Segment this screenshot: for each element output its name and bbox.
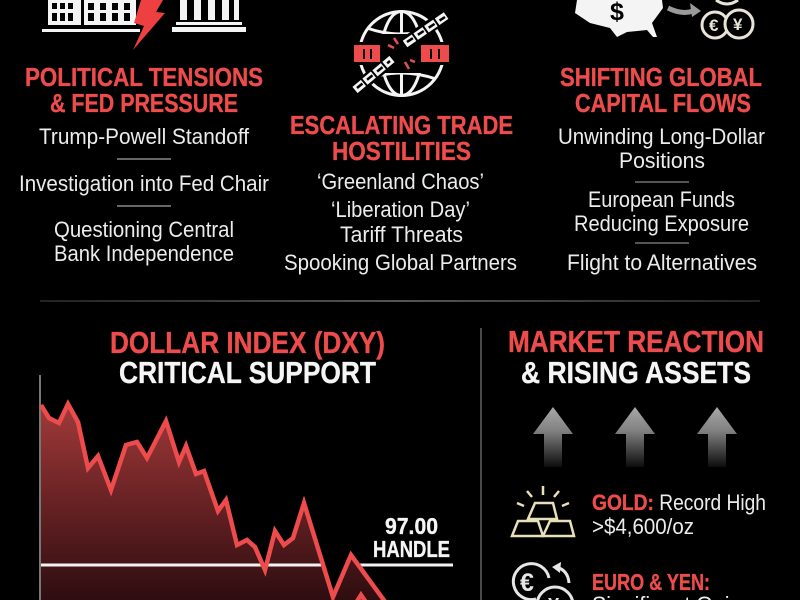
heading: capital flows xyxy=(560,62,762,118)
text: gold: >$4,600/oz xyxy=(592,514,694,539)
icon: US map, arrow and coins: € xyxy=(709,16,719,35)
text block: political tensions points: Trump-Powell Standoff xyxy=(39,124,250,149)
icon: gold bars xyxy=(512,486,574,536)
heading: capital flows: CAPITAL FLOWS xyxy=(575,88,751,118)
icon: euro and yen xyxy=(513,562,573,600)
icon: euro and yen: € xyxy=(520,569,534,597)
heading: trade hostilities: HOSTILITIES xyxy=(332,136,471,166)
heading: political tensions: & FED PRESSURE xyxy=(50,88,238,118)
panel: dollar index xyxy=(39,325,453,600)
heading: political tensions xyxy=(25,62,263,118)
line chart: DXY xyxy=(39,375,453,600)
heading: trade hostilities: ESCALATING TRADE xyxy=(290,110,513,140)
text: euro and yen: EURO & YEN: xyxy=(592,569,710,595)
heading: market reaction: & RISING ASSETS xyxy=(521,355,751,390)
text block: trade hostilities points: Tariff Threats xyxy=(340,222,463,247)
text block: capital flows points: Unwinding Long-Dollar xyxy=(558,124,765,149)
heading: dollar index: CRITICAL SUPPORT xyxy=(119,355,376,390)
callout: 97.00 handle: HANDLE xyxy=(373,536,450,562)
heading: trade hostilities xyxy=(290,110,513,166)
text block: political tensions points: Investigation into Fed Chair xyxy=(19,171,269,196)
heading: dollar index: DOLLAR INDEX (DXY) xyxy=(110,325,385,360)
icon: capitol, lightning bolt and bank xyxy=(42,0,246,50)
text block: political tensions points: Questioning Central xyxy=(54,217,234,242)
text: gold: GOLD: Record High xyxy=(592,490,766,515)
text block: trade hostilities points: Spooking Global Partners xyxy=(284,250,517,275)
heading: dollar index xyxy=(110,325,385,390)
text block: capital flows points xyxy=(558,124,765,275)
panel: capital flows xyxy=(558,0,765,275)
heading: capital flows: SHIFTING GLOBAL xyxy=(560,62,762,92)
panel: trade hostilities xyxy=(284,11,517,275)
text block: capital flows points: Flight to Alternatives xyxy=(567,250,757,275)
heading: market reaction xyxy=(508,324,764,390)
text block: trade hostilities points xyxy=(284,169,517,275)
text block: capital flows points: Positions xyxy=(619,148,705,173)
icon: US map, arrow and coins xyxy=(575,0,753,38)
text block: capital flows points: European Funds xyxy=(588,187,735,212)
icon: globe with broken chain xyxy=(350,11,454,96)
icon: up arrows xyxy=(533,407,737,467)
text block: trade hostilities points: ‘Liberation Day’ xyxy=(331,197,470,222)
text block: capital flows points: Reducing Exposure xyxy=(574,211,749,236)
icon: US map, arrow and coins: ¥ xyxy=(733,15,743,34)
text: gold xyxy=(592,490,766,539)
text block: political tensions points xyxy=(19,124,269,266)
callout: 97.00 handle: 97.00 xyxy=(385,513,438,539)
panel: political tensions xyxy=(19,0,269,266)
callout: 97.00 handle xyxy=(373,513,450,562)
text block: political tensions points: Bank Independence xyxy=(54,241,234,266)
text block: trade hostilities points: ‘Greenland Chaos’ xyxy=(317,169,484,194)
panel: market reaction xyxy=(508,324,766,600)
heading: political tensions: POLITICAL TENSIONS xyxy=(25,62,263,92)
